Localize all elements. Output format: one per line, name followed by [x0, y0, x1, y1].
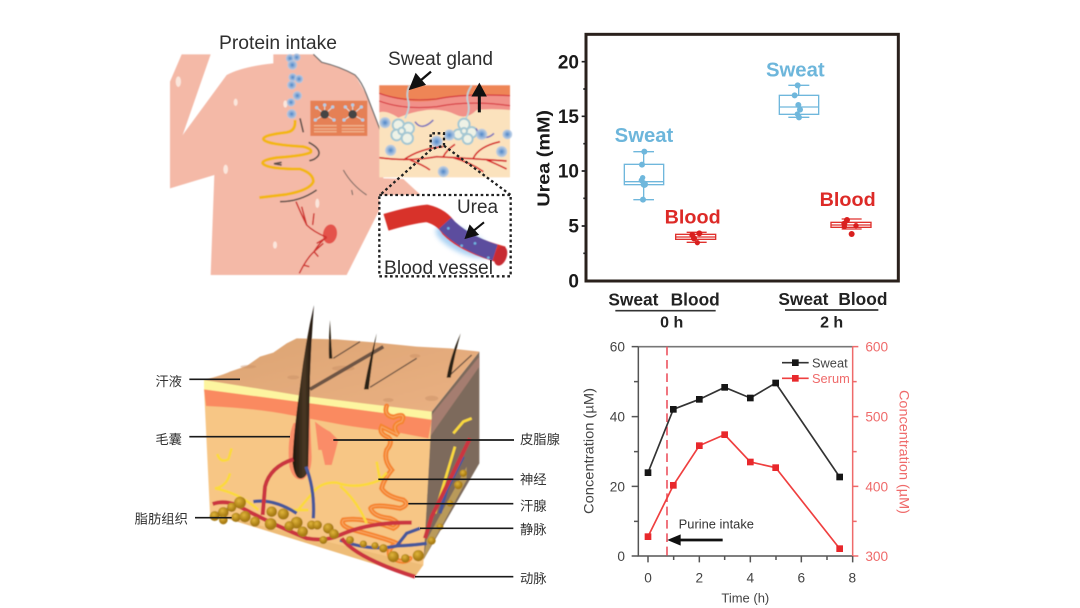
label: sebaceous gland: 皮脂腺	[520, 432, 560, 447]
box: blood 0 h	[676, 230, 716, 245]
sweat gland coil	[342, 406, 410, 561]
series: serum	[645, 431, 843, 552]
urea molecules descending	[286, 53, 303, 119]
left axis numbers	[610, 339, 625, 564]
left axis numbers: 20	[610, 479, 625, 494]
fat globules	[210, 470, 467, 563]
intake marker dashed line	[664, 347, 669, 556]
blood vessel	[431, 219, 495, 265]
x axis numbers: 0	[644, 570, 652, 585]
x labels: 2 h group: 2 h	[820, 315, 843, 332]
x axis numbers: 2	[696, 570, 703, 585]
yellow epidermis strip	[204, 379, 432, 419]
label: sweat gland: Sweat gland	[388, 49, 493, 70]
right axis numbers: 300	[865, 549, 889, 564]
right axis numbers	[865, 339, 889, 564]
x axis numbers: 6	[798, 570, 805, 585]
y axis ticks and labels: 15	[558, 107, 579, 128]
label: blood vessel: Blood vessel	[384, 258, 493, 279]
y axis title: Urea (mM)	[533, 110, 553, 207]
box: sweat 0 h	[624, 149, 664, 203]
panel: skin structure diagram	[135, 305, 560, 586]
yellow intestine line	[259, 120, 313, 198]
arrow: upward secretion	[474, 86, 484, 112]
right axis numbers: 600	[865, 339, 889, 354]
label: artery: 动脉	[520, 571, 547, 586]
right axis numbers: 500	[865, 410, 889, 425]
label: sweat 2 h: Sweat	[766, 59, 825, 81]
x labels: 2 h group: Blood	[838, 289, 887, 309]
arrow: urea pointer	[466, 222, 484, 238]
x labels: 2 h group	[778, 289, 887, 332]
y axis ticks and labels: 20	[558, 52, 579, 73]
x axis numbers: 8	[849, 570, 856, 585]
zoom callout dotted lines	[379, 133, 511, 276]
skin block front	[204, 387, 432, 572]
x axis numbers	[644, 570, 856, 585]
arrow: purine intake	[671, 536, 723, 544]
label: blood 2 h: Blood	[820, 189, 876, 211]
label: purine intake: Purine intake	[679, 517, 754, 532]
box: sweat 2 h	[779, 82, 819, 120]
blood capillaries	[379, 142, 507, 172]
label: urea: Urea	[457, 197, 498, 218]
dark hairs	[293, 305, 314, 478]
labels	[135, 374, 560, 586]
kidney and vessels	[321, 223, 339, 245]
x labels: 0 h group	[608, 290, 720, 332]
arteries	[213, 438, 470, 577]
arrow: sweat gland pointer	[411, 72, 431, 88]
legend	[782, 355, 850, 386]
skin surface texture	[240, 354, 438, 402]
heading: protein intake: Protein intake	[219, 33, 337, 54]
right axis	[853, 347, 858, 556]
left axis title: Concentration (µM)	[580, 388, 596, 514]
hair grooves	[310, 347, 383, 389]
veins	[218, 457, 463, 548]
nerves	[215, 418, 472, 523]
x labels: 2 h group: Sweat	[778, 289, 829, 309]
molecules in tissue	[379, 117, 512, 177]
sebaceous gland and follicle	[315, 422, 338, 465]
chart: urea box plot	[533, 34, 898, 332]
left axis numbers: 60	[610, 339, 625, 354]
label: blood 0 h: Blood	[665, 206, 721, 228]
series: sweat	[645, 380, 843, 480]
top surface	[204, 338, 479, 412]
y axis ticks and labels: 5	[568, 217, 579, 238]
body silhouette	[170, 54, 421, 275]
legend: Sweat	[812, 355, 848, 370]
x labels: 0 h group: Sweat	[608, 290, 659, 310]
y axis ticks and labels: 0	[568, 271, 579, 292]
y axis ticks and labels	[558, 52, 586, 292]
left axis numbers: 0	[617, 549, 625, 564]
skin cross-section	[379, 85, 510, 177]
chart: purine intake time course	[580, 339, 912, 605]
panel: protein intake and sweat gland illustration	[170, 53, 512, 276]
sensor patch	[310, 101, 367, 136]
label: vein: 静脉	[520, 522, 547, 537]
label: fat tissue: 脂肪组织	[135, 512, 188, 527]
x axis numbers: 4	[747, 570, 755, 585]
sweat droplets	[176, 76, 319, 249]
x axis title: Time (h)	[721, 590, 769, 605]
right axis title: Concentration (µM)	[896, 390, 912, 514]
red dermis strip	[204, 388, 432, 438]
y axis ticks and labels: 10	[558, 162, 579, 183]
label: sweat fluid: 汗液	[155, 374, 182, 389]
plot frame	[638, 344, 853, 349]
legend: Serum	[812, 371, 850, 386]
plot frame	[586, 34, 898, 281]
left ticks and x ticks	[632, 347, 853, 562]
skin block right side	[423, 352, 479, 560]
leader lines	[189, 379, 514, 577]
sweat ducts and coils	[405, 86, 472, 118]
label: hair follicle: 毛囊	[155, 431, 182, 447]
x labels: 0 h group: Blood	[671, 290, 720, 310]
label: sweat 0 h: Sweat	[615, 125, 674, 147]
label: sweat gland: 汗腺	[520, 499, 547, 514]
right axis numbers: 400	[865, 479, 889, 494]
label: nerve: 神经	[520, 472, 547, 487]
x labels: 0 h group: 0 h	[660, 315, 683, 332]
box: blood 2 h	[831, 217, 871, 237]
left axis numbers: 40	[610, 410, 625, 425]
